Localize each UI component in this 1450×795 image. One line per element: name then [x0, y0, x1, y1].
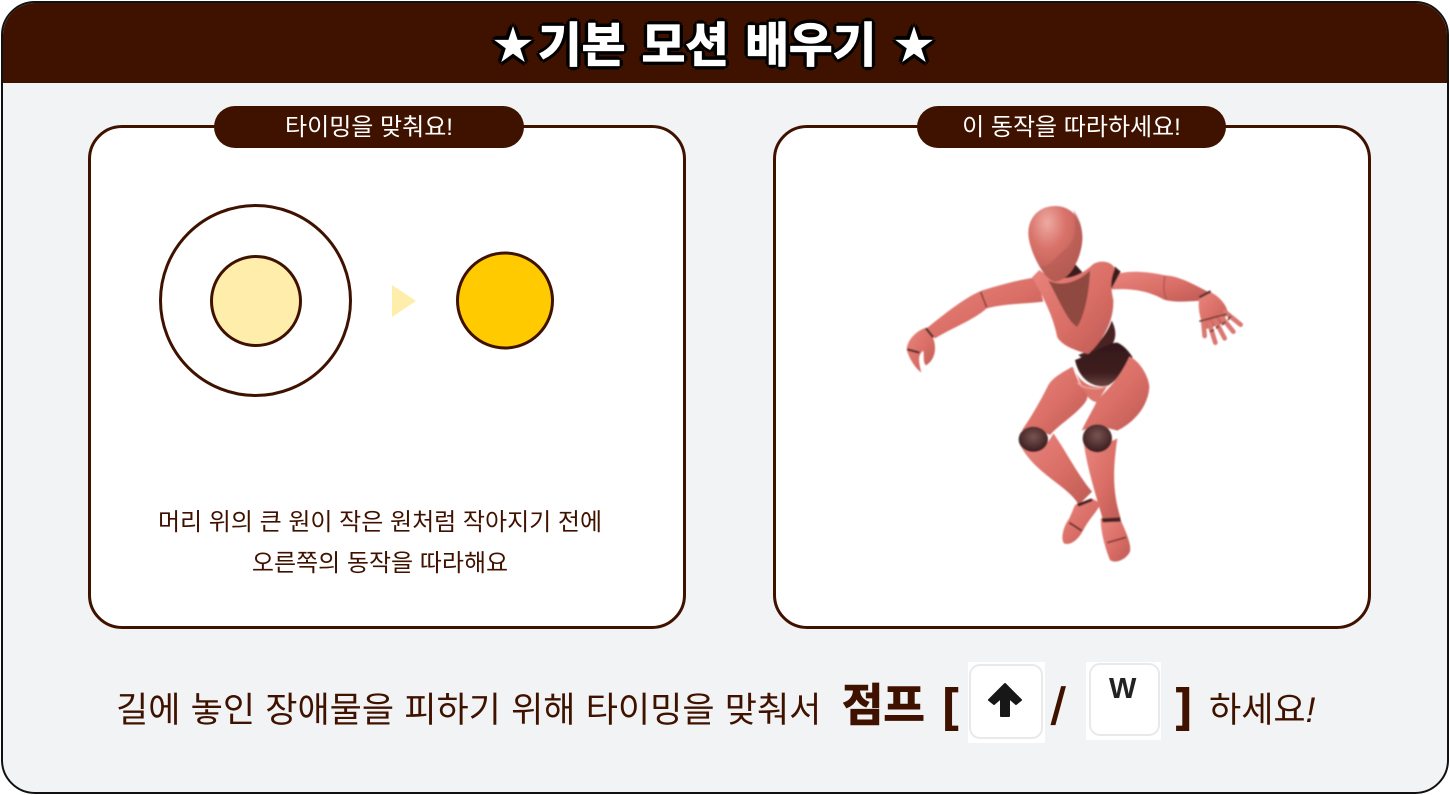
slash: /: [1051, 678, 1065, 736]
suffix text: 하세요!: [1209, 691, 1315, 730]
pelvis front band: [1073, 367, 1107, 402]
key: W: [1086, 662, 1161, 740]
title text: 기본 모션 배우기: [538, 20, 876, 73]
front leg shin and foot: [1019, 433, 1101, 544]
panel: motion: [773, 125, 1371, 629]
inner pale circle: [212, 256, 300, 346]
pill heading: timing: 타이밍을 맞춰요!: [285, 114, 453, 141]
timing instructions: [158, 509, 602, 577]
timing diagram: [159, 204, 554, 397]
right hand: [1199, 292, 1241, 343]
title: [490, 18, 936, 73]
bottom instruction line: [116, 662, 1315, 743]
pill heading: timing: [214, 106, 524, 148]
arms: [907, 272, 1241, 373]
title star left: ★: [493, 24, 533, 68]
thighs: [1022, 357, 1149, 435]
jump emphasis: 점프: [842, 680, 925, 731]
neck and waist: [1058, 264, 1121, 362]
knees: [1019, 424, 1112, 452]
pill heading: motion: [917, 106, 1226, 148]
key: up arrow: [968, 662, 1045, 743]
right thigh: [1082, 357, 1149, 431]
timing instructions: 오른쪽의 동작을 따라해요: [252, 550, 508, 577]
instruction text: 길에 놓인 장애물을 피하기 위해 타이밍을 맞춰서: [116, 691, 821, 730]
pill heading: motion: 이 동작을 따라하세요!: [962, 114, 1181, 141]
close bracket: ]: [1176, 679, 1191, 731]
torso: [1032, 262, 1115, 354]
outer shrinking ring: [160, 206, 350, 396]
title star right: ★: [894, 24, 934, 68]
arrow glyph: [988, 683, 1022, 717]
timing instructions: 머리 위의 큰 원이 작은 원처럼 작아지기 전에: [158, 509, 602, 536]
open bracket: [: [943, 679, 958, 731]
left thigh: [1022, 367, 1087, 435]
target yellow circle: [458, 253, 552, 348]
arrow: [392, 285, 416, 317]
head: [1028, 206, 1082, 282]
title banner: [3, 3, 1447, 83]
W glyph: W: [1109, 673, 1136, 705]
panel: timing: [88, 125, 686, 629]
jumping mannequin figure: [906, 205, 1244, 563]
back leg shin and foot: [1084, 438, 1130, 562]
pelvis: [1075, 343, 1133, 386]
